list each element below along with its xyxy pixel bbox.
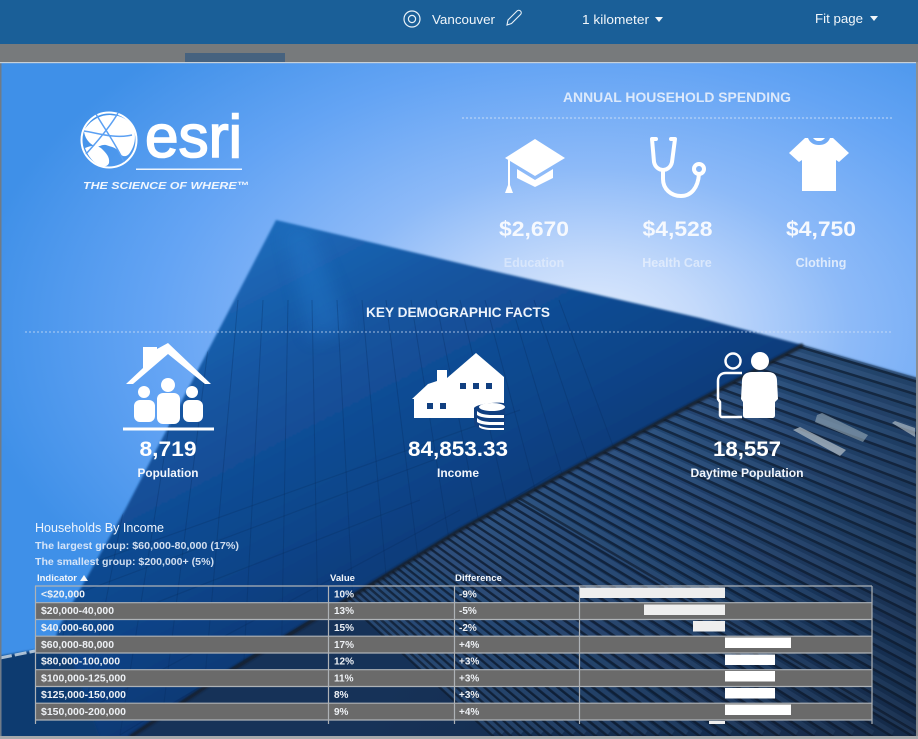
table rows: +3% [459,656,479,668]
stat: education [499,218,569,270]
icon: distance caret [655,17,663,22]
difference bars [580,588,791,724]
logo rule [136,168,242,170]
stat: health care [642,218,713,270]
table rows: 8% [334,690,349,701]
icon: daytime people [718,352,778,418]
icon: house with coins [412,353,505,430]
icon: globe [82,112,136,168]
heading: Households By Income [35,520,164,535]
table header: Value [330,573,355,584]
table rows: 15% [334,623,354,634]
table rows: $20,000-40,000 [41,606,114,617]
stat: clothing: $4,750 [786,218,856,241]
tab strip [0,44,918,62]
stat: daytime population [690,438,804,480]
table rows [41,590,479,718]
table rows: $60,000-80,000 [41,640,114,651]
table rows: $80,000-100,000 [41,656,120,668]
table header [37,573,502,584]
location name: Vancouver [432,12,496,27]
table rows: 12% [334,656,354,668]
icon: fit page caret [870,16,878,21]
fit page selector: Fit page [815,11,863,26]
stat: population [138,438,198,480]
table rows: <$20,000 [41,590,85,600]
table rows: 11% [334,674,354,684]
icon: graduation cap [505,139,565,193]
heading: KEY DEMOGRAPHIC FACTS [366,304,550,320]
summary: smallest group: The smallest group: $200,000+ (5%) [35,556,214,568]
icon: pencil [507,10,521,25]
table rows: -9% [459,590,477,600]
stat: education: Education [504,256,564,270]
table rows: $125,000-150,000 [41,690,126,701]
panel: annual household spending [462,89,893,270]
summary: largest group: The largest group: $60,000-80,000 (17%) [35,540,239,552]
distance selector: 1 kilometer [582,12,650,27]
stat: education: $2,670 [499,218,569,241]
stat: daytime population: Daytime Population [690,466,804,480]
panel: key demographic facts [25,304,893,480]
stat: population: 8,719 [140,438,196,461]
table rows: $100,000-125,000 [41,674,126,684]
heading: ANNUAL HOUSEHOLD SPENDING [563,89,791,105]
stat: income [408,438,508,480]
tagline: THE SCIENCE OF WHERE™ [83,180,249,192]
table rows: +3% [459,674,479,684]
stat: clothing [786,218,856,270]
table header: Difference [455,573,502,584]
table header: Indicator [37,573,77,584]
panel: households by income [35,520,872,724]
logo: esri [82,103,249,192]
table rows: 13% [334,606,354,617]
stat: health care: $4,528 [642,218,713,241]
stat: income: 84,853.33 [408,438,508,461]
stat: daytime population: 18,557 [713,438,781,461]
table rows: 10% [334,590,354,600]
stat: clothing: Clothing [796,256,846,270]
table rows: 9% [334,707,349,718]
table rows: -2% [459,623,477,634]
table [35,586,872,724]
table rows: +4% [459,707,479,718]
stat: health care: Health Care [642,256,712,270]
table rows: $40,000-60,000 [41,623,114,634]
stat: income: Income [437,466,479,480]
top toolbar [0,0,918,44]
stat: population: Population [138,466,198,480]
table rows: 17% [334,640,354,651]
wordmark: esri [145,103,242,170]
icon: location target [404,11,420,27]
table rows: -5% [459,606,477,617]
icon: family house [123,343,214,430]
table rows: $150,000-200,000 [41,707,126,718]
low building [0,650,100,738]
table rows: +4% [459,640,479,651]
icon: t-shirt [789,138,849,191]
icon: stethoscope [652,139,704,196]
table rows: +3% [459,690,479,701]
